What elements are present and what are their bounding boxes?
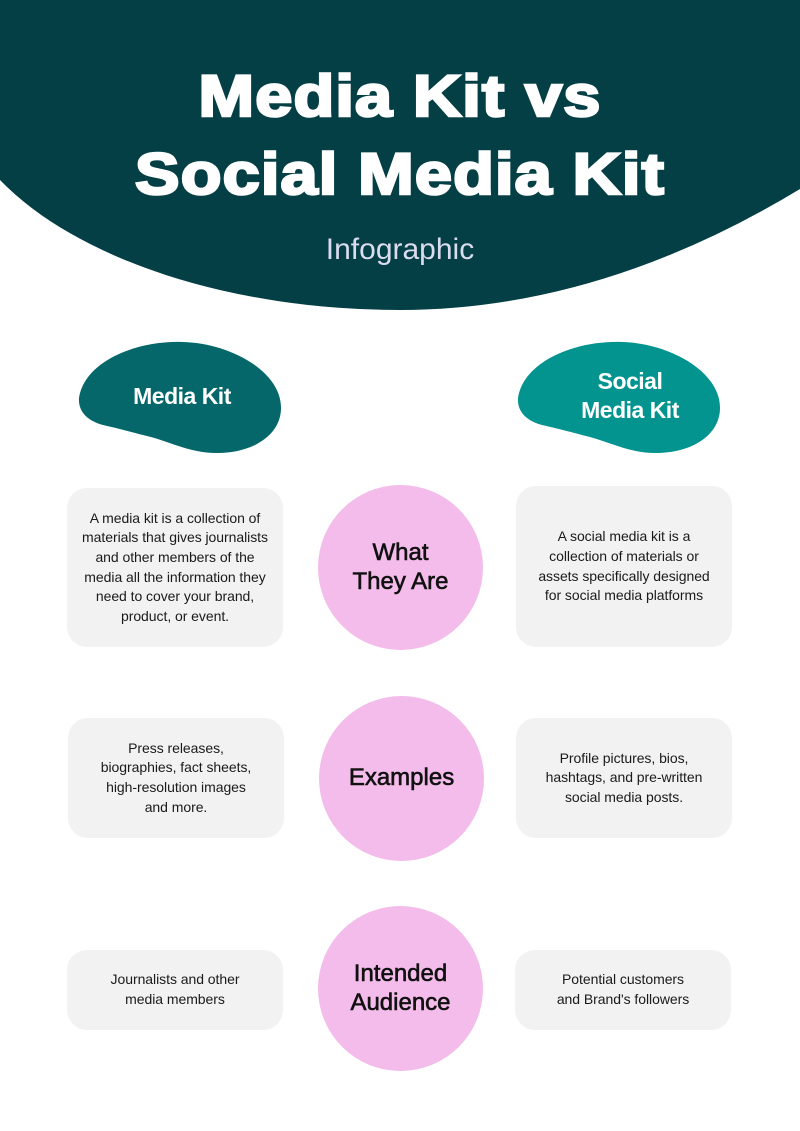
card: social media kit audience: Potential customers — [562, 971, 684, 987]
card: social media kit definition: collection of materials or — [549, 548, 699, 564]
header background — [0, 0, 800, 310]
circle: Examples: Examples — [349, 764, 454, 791]
card: media kit audience — [67, 950, 283, 1030]
circle: What They Are — [318, 485, 483, 650]
blob: Social Media Kit — [518, 342, 720, 453]
card: social media kit examples: Profile pictures, bios, — [560, 750, 688, 766]
card: media kit definition: media all the information they — [84, 568, 266, 584]
card: media kit definition — [67, 488, 283, 647]
circle: What They Are: What — [372, 538, 428, 566]
blob: Social Media Kit: Social — [598, 368, 662, 394]
title — [135, 64, 665, 207]
title: Media Kit vs — [198, 64, 602, 129]
card: social media kit examples — [516, 718, 732, 838]
card: media kit definition: product, or event. — [121, 608, 229, 624]
card: social media kit audience — [515, 950, 731, 1030]
subtitle: Infographic — [326, 233, 474, 266]
card: media kit examples: Press releases, — [128, 740, 224, 756]
blob: Media Kit: Media Kit — [133, 383, 231, 409]
title: Social Media Kit — [135, 142, 665, 207]
circle: Intended Audience: Intended — [354, 960, 447, 986]
card: social media kit definition: for social media platforms — [545, 587, 703, 603]
card: media kit examples: biographies, fact sheets, — [101, 759, 251, 775]
blob: Media Kit — [78, 342, 281, 453]
card: media kit examples — [68, 718, 284, 838]
card: media kit definition: need to cover your brand, — [96, 588, 254, 604]
card: media kit audience: media members — [125, 991, 225, 1007]
blob: Social Media Kit: Media Kit — [581, 397, 679, 423]
card: social media kit audience: and Brand's followers — [557, 991, 689, 1007]
circle: Examples — [319, 696, 484, 861]
circle: Intended Audience: Audience — [350, 988, 451, 1016]
card: media kit audience: Journalists and other — [111, 971, 239, 987]
card: media kit definition: A media kit is a collection of — [90, 510, 260, 526]
card: media kit examples: high-resolution images — [106, 779, 246, 795]
card: media kit examples: and more. — [145, 799, 207, 815]
card: social media kit definition: assets specifically designed — [538, 568, 710, 584]
card: social media kit definition — [516, 486, 732, 647]
card: social media kit examples: hashtags, and pre-written — [546, 769, 702, 785]
circle: Intended Audience — [318, 906, 483, 1071]
card: social media kit definition: A social media kit is a — [558, 528, 690, 544]
circle: What They Are: They Are — [352, 568, 449, 594]
card: media kit definition: materials that gives journalists — [82, 529, 268, 545]
card: media kit definition: and other members of the — [95, 549, 255, 565]
card: social media kit examples: social media posts. — [565, 789, 683, 805]
